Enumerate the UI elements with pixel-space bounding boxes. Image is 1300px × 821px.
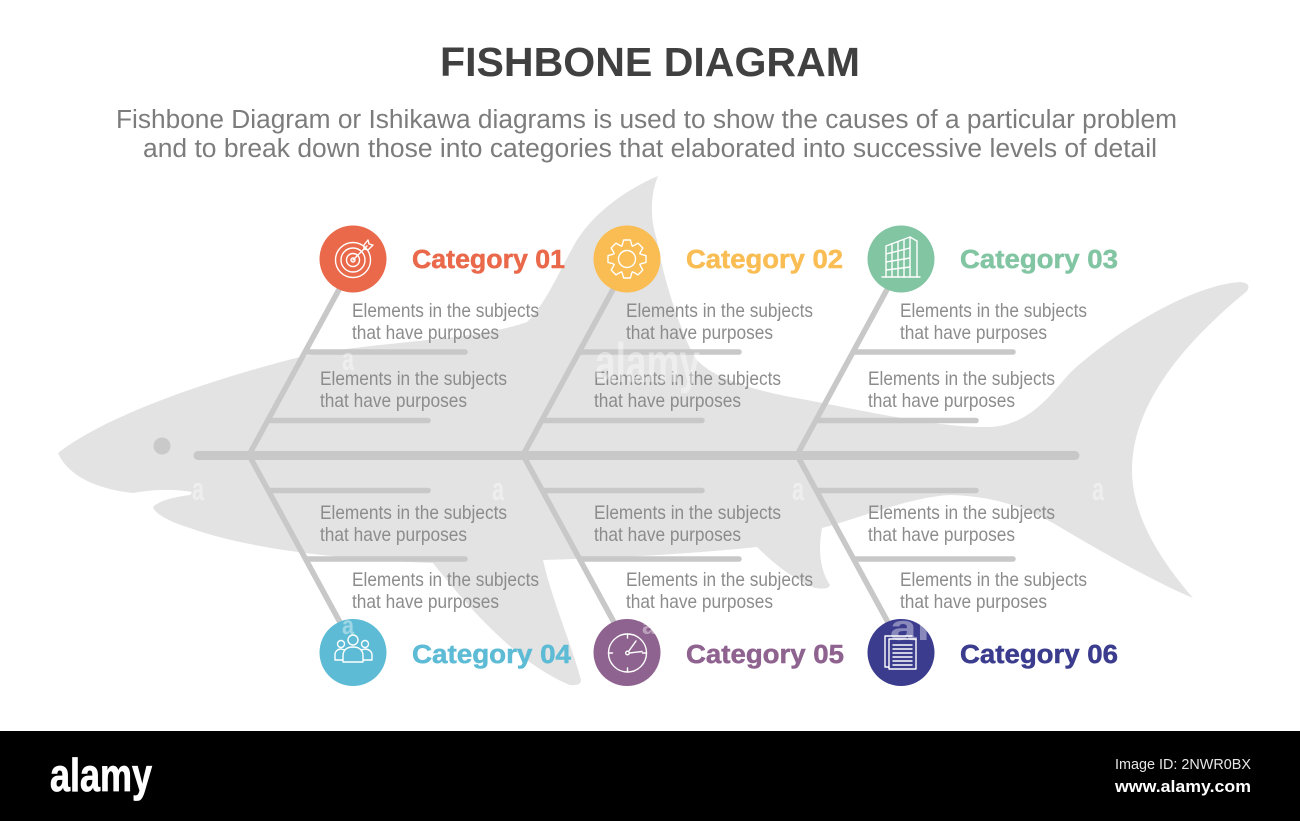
category 05 [594,619,844,686]
bones: column 1 [249,284,465,626]
icon: clock [608,634,646,672]
element texts: Elements in the subjects [900,300,1087,322]
element texts [320,300,1087,613]
element texts: that have purposes [352,322,499,344]
icon: documents [885,636,916,669]
watermark overlays: a [342,341,354,377]
watermark overlays: a [492,471,504,507]
element texts: Elements in the subjects [594,368,781,390]
category 03 [868,226,1118,292]
icon: people [335,635,372,662]
subtitle: Fishbone Diagram or Ishikawa diagrams is used to show the causes of a particular problem [116,106,1177,134]
watermark overlays: al [890,607,930,648]
element texts: that have purposes [320,524,467,546]
element texts: that have purposes [626,322,773,344]
element texts: that have purposes [352,591,499,613]
watermark overlays: a [1092,471,1104,507]
title: FISHBONE DIAGRAM [440,39,860,85]
label: category 05: Category 05 [686,641,844,669]
icon: target [336,240,373,278]
element texts: Elements in the subjects [352,300,539,322]
element texts: that have purposes [900,591,1047,613]
category 06 [868,619,1118,686]
label: category 01: Category 01 [412,246,565,274]
element texts: Elements in the subjects [900,569,1087,591]
watermark overlays: alamy [595,331,700,394]
watermark overlays: a [342,610,354,640]
element texts: that have purposes [626,591,773,613]
icon: building [882,237,920,277]
footer logo: alamy [50,749,152,801]
watermark overlays: a [192,471,204,507]
fishbone skeleton [198,284,1075,626]
shark eye [154,438,170,454]
element texts: Elements in the subjects [352,569,539,591]
element texts: that have purposes [594,524,741,546]
category 01 [320,226,565,292]
element texts: that have purposes [868,524,1015,546]
category 02 [594,226,843,292]
label: category 04: Category 04 [412,641,572,669]
element texts: Elements in the subjects [594,502,781,524]
label: category 06: Category 06 [960,641,1118,669]
element texts: that have purposes [900,322,1047,344]
element texts: that have purposes [320,390,467,412]
subtitle [116,106,1177,163]
watermark overlays [192,331,1104,648]
element texts: Elements in the subjects [868,502,1055,524]
element texts: Elements in the subjects [320,368,507,390]
label: category 03: Category 03 [960,246,1118,274]
watermark overlays: a [792,471,804,507]
shark silhouette [58,176,1248,685]
element texts: that have purposes [868,390,1015,412]
spine [198,451,1075,460]
footer bar [0,731,1300,821]
bones: column 3 [797,284,1013,626]
subtitle: and to break down those into categories that elaborated into successive levels of detail [143,135,1157,163]
element texts: Elements in the subjects [626,300,813,322]
icon: gear [608,240,646,278]
element texts: Elements in the subjects [868,368,1055,390]
image id: Image ID: 2NWR0BX [1115,756,1251,773]
watermark overlays: a [642,613,657,640]
element texts: Elements in the subjects [626,569,813,591]
label: category 02: Category 02 [686,246,843,274]
element texts: that have purposes [594,390,741,412]
bones: column 2 [523,284,739,626]
category 04 [320,619,572,686]
element texts: Elements in the subjects [320,502,507,524]
website: www.alamy.com [1114,777,1251,796]
